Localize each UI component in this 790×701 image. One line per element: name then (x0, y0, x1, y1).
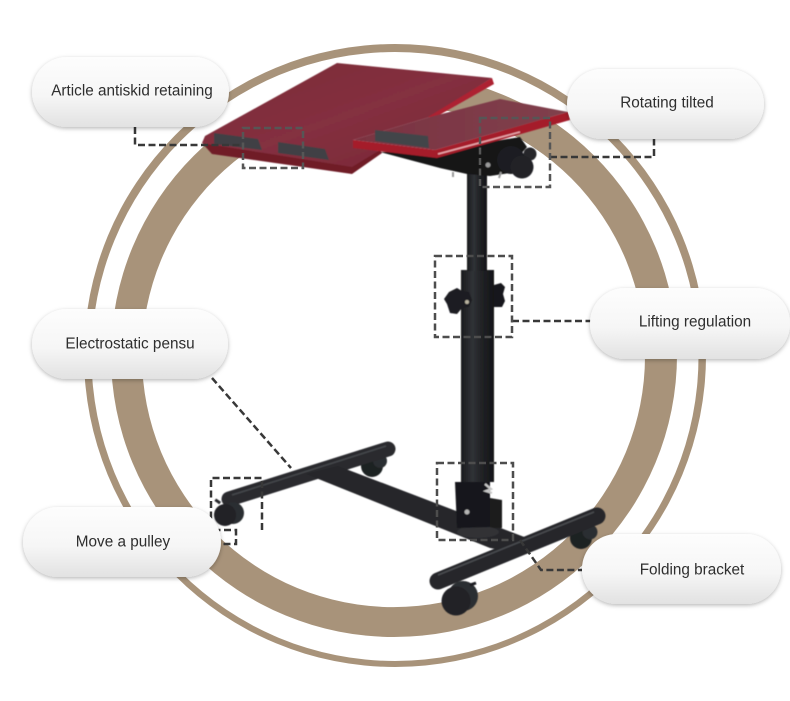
tilt knob (486, 146, 536, 178)
front caster (442, 581, 478, 616)
leader: rotating tilted (550, 139, 654, 157)
pill: Electrostatic pensu: Electrostatic pensu (65, 336, 195, 352)
pill: Move a pulley: Move a pulley (76, 534, 171, 550)
pill: Folding bracket (582, 534, 781, 604)
pill: Lifting regulation: Lifting regulation (639, 314, 751, 330)
raised rear edge (428, 78, 494, 118)
left tabletop (202, 63, 494, 174)
leader: folding bracket (520, 540, 582, 570)
outer thin ring (84, 44, 706, 667)
pill: Rotating tilted (567, 69, 764, 139)
box: tilt mechanism (480, 118, 550, 187)
left pulley caster (214, 498, 244, 526)
pill: Rotating tilted: Rotating tilted (620, 94, 714, 112)
box: folding bracket (437, 463, 513, 540)
box: article stoppers (243, 128, 303, 168)
box: pulley (211, 478, 262, 544)
height lock knob right (494, 283, 505, 307)
decorative rings (84, 44, 706, 667)
stopper left (214, 133, 262, 150)
inner thick ring (111, 73, 677, 637)
base main beam (306, 466, 527, 554)
front edge (202, 143, 382, 174)
surface (353, 99, 568, 150)
column base bracket (455, 482, 502, 538)
column inner pole (467, 172, 487, 271)
rear caster (359, 450, 387, 477)
stopper right (375, 130, 429, 148)
pill: Lifting regulation (590, 288, 790, 359)
callout leader lines (135, 118, 654, 570)
leader: electrostatic pensu (212, 378, 291, 468)
front edge (353, 112, 570, 158)
pill: Article antiskid retaining: Article antiskid retaining (51, 82, 213, 100)
base front crossbar (438, 516, 597, 581)
base crossbar rear (229, 449, 388, 499)
pill: Article antiskid retaining (32, 57, 229, 127)
column sleeve (461, 270, 494, 482)
product: mobile laptop table (202, 63, 598, 616)
right tabletop (353, 99, 570, 158)
pill: Electrostatic pensu (32, 309, 228, 379)
tabletop surface (202, 63, 492, 168)
right caster (570, 524, 598, 549)
stopper centre (278, 142, 329, 160)
small tilt bolts (453, 172, 501, 178)
height lock knob left (444, 288, 472, 314)
leader: lifting regulation (512, 320, 591, 322)
box: lifting knobs (435, 256, 512, 337)
edge highlight (438, 132, 520, 154)
pill: Move a pulley (23, 507, 221, 577)
tilt bracket under tabletop (380, 137, 527, 176)
pill: Folding bracket: Folding bracket (640, 562, 745, 578)
leader: article antiskid retaining (135, 127, 243, 145)
